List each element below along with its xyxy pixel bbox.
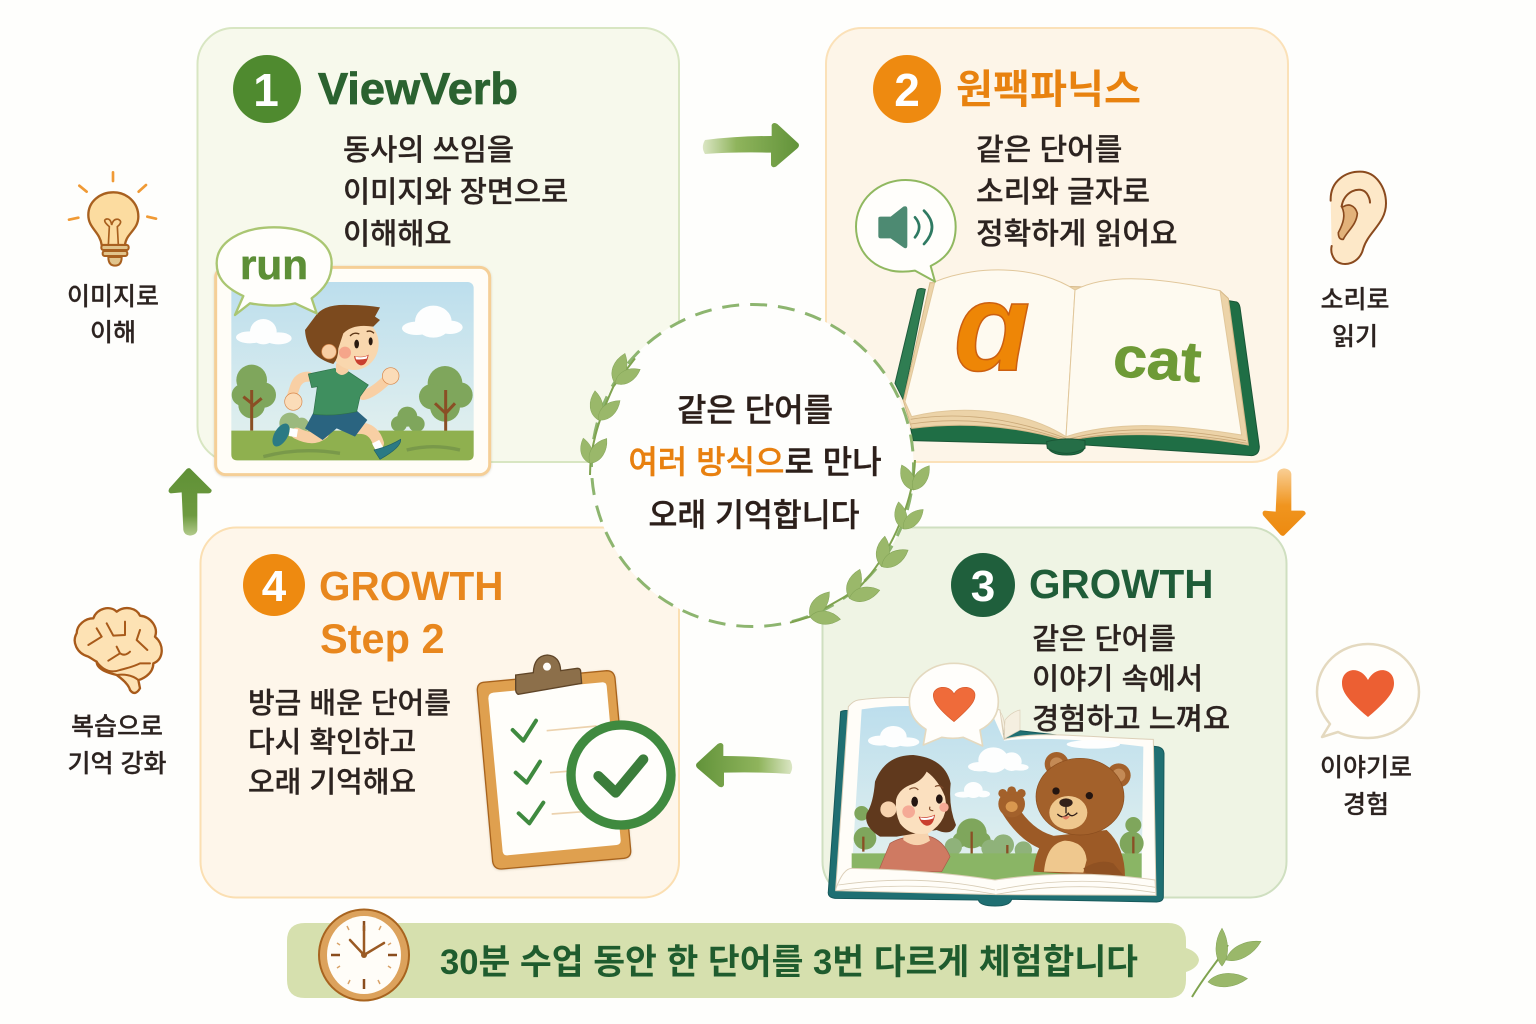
- letter a: ɑ: [954, 258, 1030, 397]
- heading: GROWTH Step 2: GROWTH: [319, 563, 503, 609]
- center text: 여러 방식으로 만나: [628, 444, 882, 480]
- description 1: 이해해요: [343, 218, 452, 251]
- center text: 같은 단어를: [677, 392, 833, 428]
- center text: [628, 392, 882, 533]
- description 2: 소리와 글자로: [976, 176, 1150, 209]
- badge 1: [233, 55, 301, 123]
- arrow: step 3 to step 4: [696, 743, 792, 787]
- description 3: 이야기 속에서: [1032, 663, 1203, 696]
- arrow: step 2 to step 3: [1263, 468, 1306, 536]
- arrow: step 4 to step 1: [169, 468, 212, 536]
- description 3: 같은 단어를: [1032, 623, 1176, 656]
- arrow: step 1 to step 2: [703, 123, 799, 167]
- icon: heart bubble: [1317, 644, 1419, 738]
- description 4: [248, 687, 451, 799]
- description 2: 정확하게 읽어요: [976, 218, 1178, 251]
- bottom banner: [287, 910, 1199, 1000]
- side note: 소리로 읽기: [1320, 172, 1390, 351]
- description 2: 같은 단어를: [976, 134, 1122, 167]
- speech bubble: speaker icon: [856, 180, 956, 282]
- icon: ear: [1331, 172, 1386, 264]
- label: 이야기로: [1320, 754, 1412, 782]
- label: 기억 강화: [68, 750, 166, 778]
- badge 3: 3: [971, 562, 995, 611]
- illustration: open phonics book: [895, 258, 1259, 456]
- description 4: 오래 기억해요: [248, 766, 416, 799]
- card 3 background: [822, 528, 1286, 898]
- icon: light bulb: [69, 172, 156, 266]
- banner background: [287, 923, 1199, 998]
- label: 이해: [90, 319, 136, 347]
- badge 3: [951, 553, 1015, 617]
- center text: 오래 기억합니다: [648, 497, 860, 533]
- speech bubble: heart: [909, 663, 998, 746]
- label: 읽기: [1332, 323, 1378, 351]
- description 1: 동사의 쓰임을: [343, 134, 514, 167]
- label: [1320, 754, 1412, 819]
- heading: ViewVerb: ViewVerb: [318, 65, 518, 114]
- panel: step 3 GROWTH: [822, 528, 1286, 906]
- description 1: 이미지와 장면으로: [343, 176, 568, 209]
- heading: GROWTH: GROWTH: [1029, 561, 1213, 607]
- description 3: 경험하고 느껴요: [1032, 703, 1230, 736]
- badge 2: 2: [894, 64, 920, 116]
- label: [1320, 286, 1390, 351]
- card 4 background: [200, 528, 679, 898]
- circle background: [592, 304, 914, 626]
- label: [68, 713, 166, 778]
- side note: 이야기로 경험: [1317, 644, 1419, 819]
- badge 2: [873, 55, 941, 123]
- speech bubble: run: [217, 227, 332, 315]
- speech bubble: run: run: [240, 241, 308, 288]
- label: [67, 283, 159, 347]
- card 2 background: [826, 28, 1288, 462]
- badge 1: 1: [253, 64, 279, 116]
- illustration: story book with girl and bear: [828, 697, 1164, 906]
- icon: banner sprig: [1192, 928, 1264, 997]
- icon: clock: [319, 910, 409, 1000]
- heading: GROWTH Step 2: [319, 563, 503, 662]
- panel: step 1 ViewVerb: [198, 28, 679, 475]
- description 3: [1032, 623, 1230, 736]
- description 1: [343, 134, 568, 251]
- badge 4: 4: [262, 562, 287, 611]
- side note: 복습으로 기억 강화: [68, 608, 166, 778]
- banner text: 30분 수업 동안 한 단어를 3번 다르게 체험합니다: [440, 943, 1138, 982]
- description 2: [976, 134, 1178, 251]
- center circle message: [578, 304, 934, 626]
- badge 4: [243, 554, 305, 616]
- word cat: cat: [1111, 325, 1203, 395]
- heading: 원팩파닉스: 원팩파닉스: [956, 68, 1141, 112]
- icon: brain: [75, 608, 162, 693]
- card 1 background: [198, 28, 679, 462]
- laurel branches: [578, 351, 934, 626]
- description 4: 다시 확인하고: [248, 726, 416, 759]
- panel: step 2 원팩파닉스: [826, 28, 1288, 462]
- label: 복습으로: [71, 713, 163, 741]
- label: 경험: [1343, 791, 1389, 819]
- label: 이미지로: [67, 283, 159, 311]
- label: 소리로: [1320, 286, 1390, 314]
- illustration: boy running: [216, 267, 490, 475]
- panel: step 4 GROWTH Step 2: [200, 528, 679, 898]
- side note: 이미지로 이해: [67, 172, 159, 347]
- description 4: 방금 배운 단어를: [248, 687, 451, 720]
- heading: GROWTH Step 2: Step 2: [320, 615, 445, 662]
- illustration: clipboard with check: [477, 655, 671, 869]
